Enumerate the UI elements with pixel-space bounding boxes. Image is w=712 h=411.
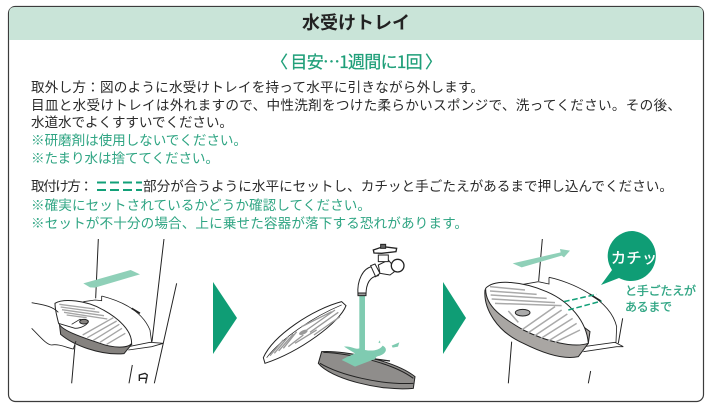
callout caption: と手ごたえが (625, 283, 696, 298)
text block: attachment instructions: 部分が合うように水平にセットし、カチッと手ごたえがあるまで押し込んでください。 (143, 179, 673, 194)
title: 水受けトレイ (302, 12, 410, 33)
text block: removal instructions: 目皿と水受けトレイは外れますので、中性洗剤をつけた柔らかいスポンジで、洗ってください。その後、 (31, 98, 681, 113)
callout caption: あるまで (625, 300, 672, 314)
text block: attachment instructions: 取付け方： (31, 179, 93, 194)
text block: removal instructions: ※たまり水は捨ててください。 (31, 151, 219, 166)
text block: removal instructions: 取外し方：図のように水受けトレイを持って水平に引きながら外します。 (31, 80, 484, 95)
callout caption (625, 283, 696, 314)
illustration: reattaching the tray (485, 239, 623, 383)
text block: removal instructions: ※研磨剤は使用しないでください。 (31, 132, 247, 148)
header band (9, 7, 703, 40)
text block: attachment instructions (31, 179, 673, 231)
callout: click sound: カチッ (611, 250, 657, 267)
arrow: step 1 to 2 (213, 282, 237, 354)
text block: attachment instructions: ※確実にセットされているかどうか確認してください。 (31, 198, 371, 213)
illustration: washing under a tap (263, 244, 415, 389)
subtitle: frequency: 〈 目安…1週間に1回 〉 (271, 48, 442, 73)
arrow: step 2 to 3 (443, 282, 466, 354)
callout: click sound (601, 231, 657, 285)
text block: removal instructions: 水道水でよくすすいでください。 (31, 115, 233, 130)
illustration: removing the tray (32, 239, 177, 383)
text block: attachment instructions: ※セットが不十分の場合、上に乗せた容器が落下する恐れがあります。 (31, 215, 468, 231)
text block: removal instructions (31, 80, 681, 166)
